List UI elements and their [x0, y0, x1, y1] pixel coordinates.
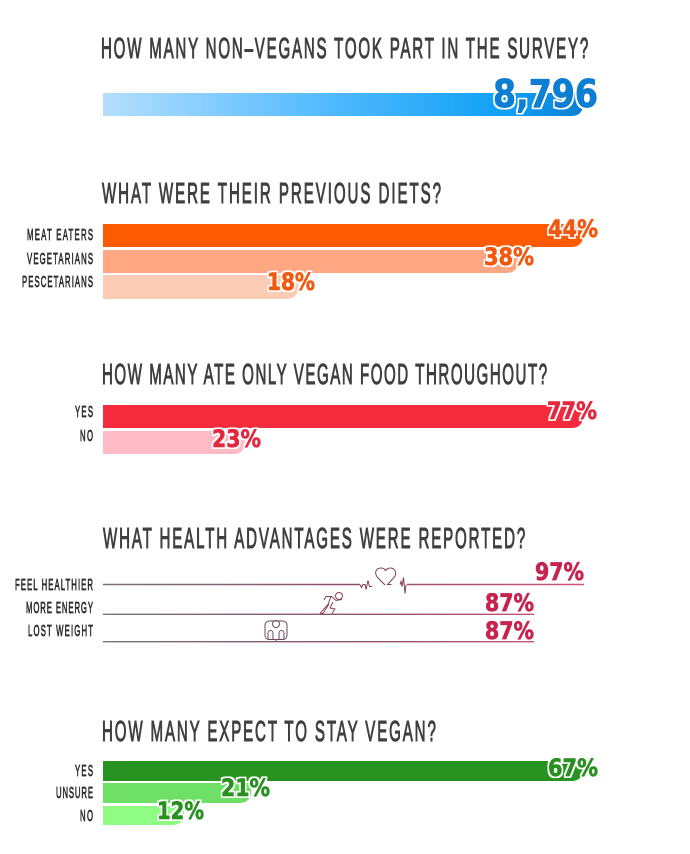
- label: no: NO: [80, 807, 93, 825]
- label: meat eaters: MEAT EATERS: [27, 226, 93, 244]
- bar: yes: [103, 405, 583, 428]
- panel: survey participants: [101, 32, 598, 116]
- bar: no: [103, 431, 245, 454]
- bar: unsure: [103, 783, 251, 803]
- label: unsure: UNSURE: [56, 784, 93, 802]
- icon: runner: [320, 592, 342, 614]
- line: lost weight: [103, 641, 534, 643]
- heading: participants: HOW MANY NON–VEGANS TOOK PART IN THE SURVEY?: [101, 32, 588, 64]
- label: yes: YES: [75, 403, 93, 421]
- line: more energy: [103, 613, 534, 615]
- label: lost weight: LOST WEIGHT: [28, 622, 93, 640]
- value: 77%: 77%: [547, 397, 597, 425]
- value: 87% weight: 87%: [485, 617, 534, 645]
- heading: vegan only: HOW MANY ATE ONLY VEGAN FOOD THROUGHOUT?: [102, 358, 547, 390]
- value: 87% energy: 87%: [485, 589, 534, 617]
- panel: stay vegan: [56, 715, 598, 825]
- panel: vegan only: [75, 358, 597, 454]
- panel: previous diets: [22, 177, 598, 299]
- bar: pescetarians: [103, 275, 298, 299]
- value: 18%: 18%: [267, 268, 315, 296]
- panel: health advantages: [15, 522, 584, 645]
- value: 23%: 23%: [212, 425, 261, 453]
- label: no: NO: [80, 427, 93, 445]
- label: pescetarians: PESCETARIANS: [22, 273, 93, 291]
- bar: yes: [103, 761, 583, 781]
- value: 44%: 44%: [548, 215, 598, 243]
- value: 38%: 38%: [484, 243, 534, 271]
- value: 21%: 21%: [221, 774, 270, 802]
- value: 8,796: 8,796: [493, 72, 598, 116]
- bar: participants: [103, 93, 583, 116]
- heading: previous diets: WHAT WERE THEIR PREVIOUS DIETS?: [102, 177, 441, 209]
- label: more energy: MORE ENERGY: [26, 599, 93, 617]
- icon: scale: [265, 620, 287, 641]
- heading: health advantages: WHAT HEALTH ADVANTAGES WERE REPORTED?: [103, 522, 525, 554]
- label: feel healthier: FEEL HEALTHIER: [15, 576, 93, 594]
- heading: stay vegan: HOW MANY EXPECT TO STAY VEGAN?: [102, 715, 436, 747]
- value: 67%: 67%: [548, 754, 598, 782]
- line: feel healthier: [103, 584, 584, 586]
- value: 97%: 97%: [535, 558, 584, 586]
- value: 12%: 12%: [157, 797, 204, 825]
- label: vegetarians: VEGETARIANS: [27, 250, 93, 268]
- label: yes: YES: [75, 762, 93, 780]
- bar: vegetarians: [103, 250, 518, 273]
- bar: meat eaters: [103, 224, 583, 247]
- bar: no: [103, 806, 184, 825]
- icon: heartbeat: [360, 568, 406, 594]
